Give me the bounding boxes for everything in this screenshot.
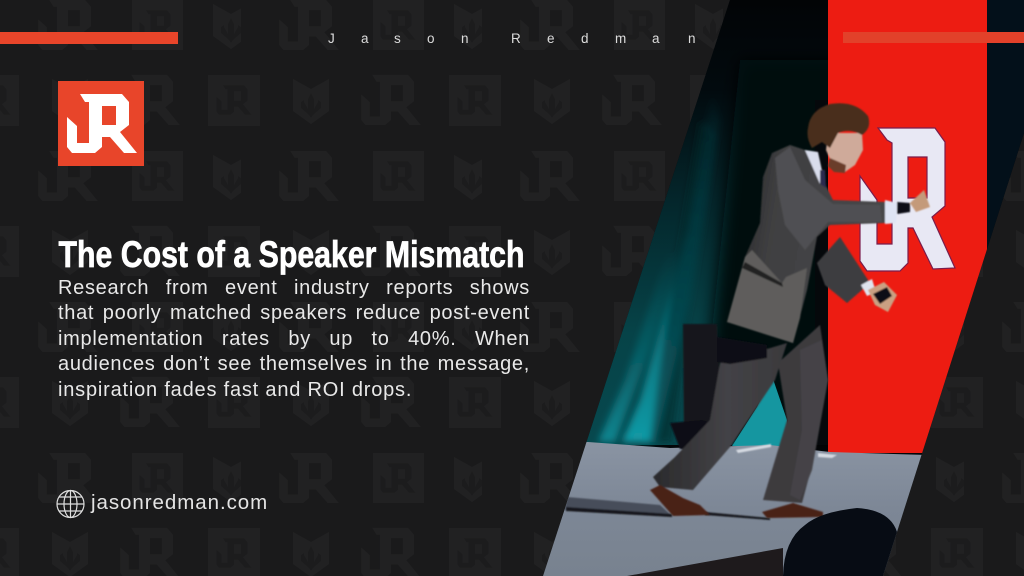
logo badge: [58, 81, 144, 166]
shadow below jacket: [717, 337, 767, 364]
red screen: [828, 0, 987, 453]
stage shadows: [565, 444, 837, 520]
audience head silhouette: [783, 508, 897, 576]
body text: that poorly matched speakers reduce post-event: [58, 302, 530, 324]
right side dark curtain: [987, 0, 1024, 250]
shoes: [650, 485, 710, 516]
left leg: [653, 343, 787, 490]
shirt and tie: [805, 150, 824, 184]
jacket: [745, 144, 886, 313]
header name: Jason Redman: [328, 31, 696, 46]
body text: audiences don’t see themselves in the message,: [58, 353, 530, 375]
cuffs and hands: [885, 200, 897, 224]
stage edge: [627, 548, 783, 576]
stage floor: [543, 442, 922, 576]
JR logo on the screen: [860, 128, 955, 271]
curtain: [586, 60, 828, 446]
body text: implementation rates by up to 40%. When: [58, 328, 530, 350]
right accent bar: [843, 32, 1024, 43]
back arm: [817, 237, 870, 303]
icon: globe: [57, 490, 84, 518]
body text: Research from event industry reports shows: [58, 276, 530, 298]
body text: [58, 276, 530, 401]
photo: speaker on stage in front of red JR screen: [543, 0, 1024, 576]
speaker figure: [650, 103, 930, 518]
website url: jasonredman.com: [91, 491, 268, 514]
face: [826, 133, 863, 172]
bag: [682, 323, 720, 422]
title: The Cost of a Speaker Mismatch: [58, 233, 524, 275]
hair: [808, 103, 869, 148]
left accent bar: [0, 32, 178, 44]
right leg: [763, 325, 828, 503]
body text: inspiration fades fast and ROI drops.: [58, 379, 412, 401]
